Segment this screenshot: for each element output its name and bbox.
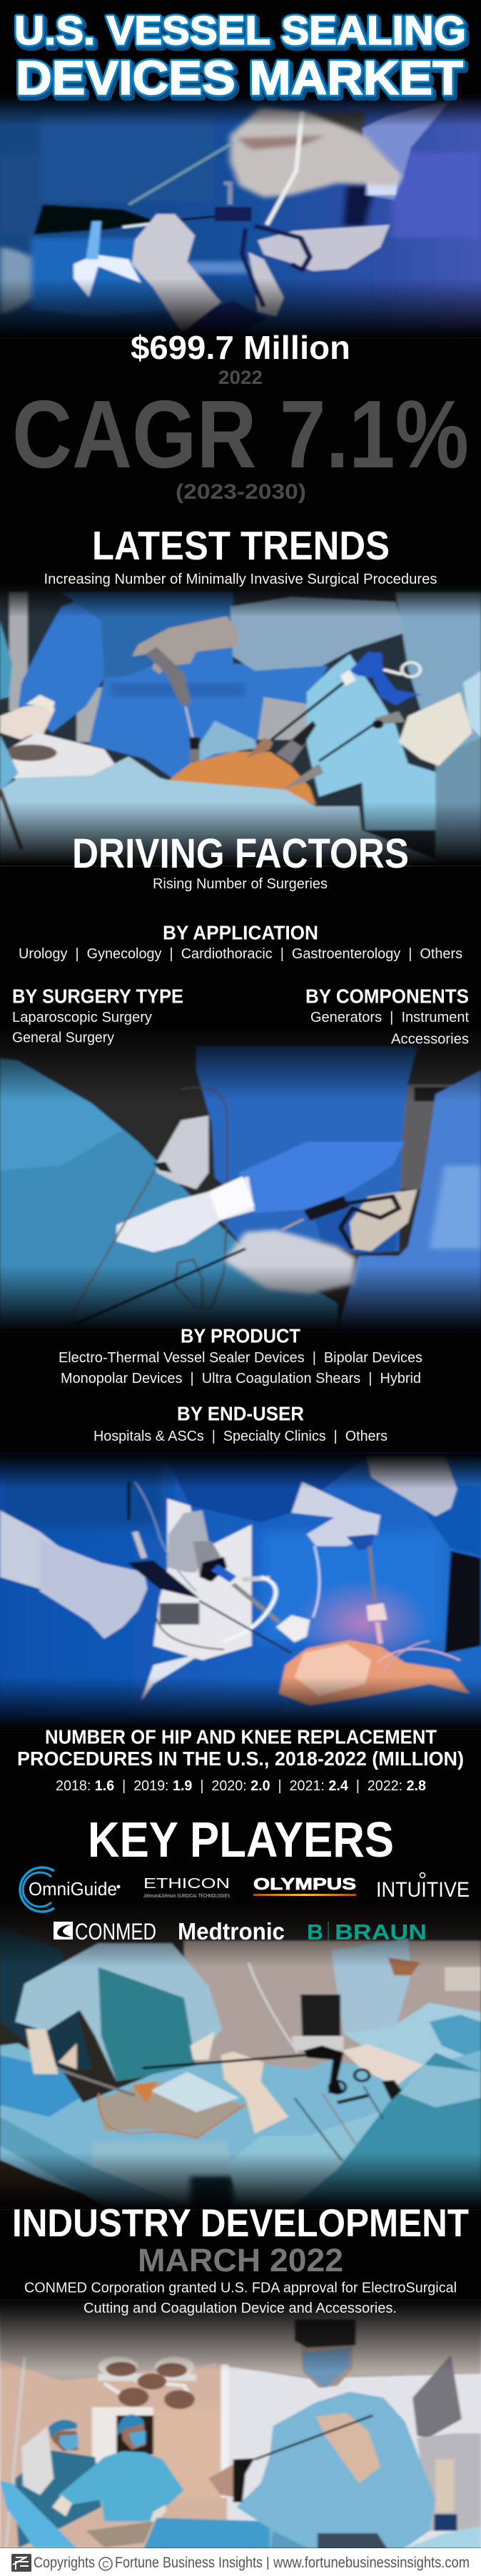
market size value: $699.7 Million bbox=[131, 329, 350, 366]
top center hand bbox=[291, 1482, 380, 1546]
ports bbox=[245, 737, 273, 759]
logo: B. Braun bbox=[307, 1920, 427, 1944]
heading: hip and knee replacement procedures: PROCEDURES IN THE U.S., 2018-2022 (MILLION) bbox=[17, 1748, 464, 1770]
title: U.S. VESSEL SEALING bbox=[14, 8, 466, 54]
logo: ConMed: CONMED bbox=[75, 1919, 156, 1944]
heading: BY COMPONENTS bbox=[305, 985, 469, 1008]
title: DEVICES MARKET bbox=[16, 51, 463, 105]
segment: laparoscopic: Laparoscopic Surgery bbox=[12, 1010, 152, 1025]
statistics by year: 2018: 1.6 | 2019: 1.9 | 2020: 2.0 | 2021: 2.4 | 2022: 2.8 bbox=[56, 1778, 426, 1794]
door alcove bbox=[92, 2407, 153, 2483]
top right glove bbox=[423, 1484, 481, 1556]
application segments: Urology | Gynecology | Cardiothoracic | Gastroenterology | Others bbox=[19, 946, 462, 962]
trend description: Increasing Number of Minimally Invasive Surgical Procedures bbox=[44, 572, 437, 587]
right glove bbox=[399, 692, 472, 766]
blue handled instrument bbox=[350, 651, 422, 705]
laparoscopic instrument bbox=[143, 2053, 335, 2068]
white background window bbox=[153, 1499, 251, 1660]
logos: key players bbox=[20, 1867, 470, 1944]
segments: Generators | Instrument bbox=[310, 1010, 469, 1025]
photo: laparoscopic surgery team around abdomen bbox=[0, 577, 481, 878]
heading: hip and knee replacement procedures: NUMBER OF HIP AND KNEE REPLACEMENT bbox=[45, 1725, 437, 1748]
right foreground drapes bbox=[227, 2107, 393, 2207]
icon: Fortune Business Insights logo bbox=[11, 2554, 31, 2572]
logo: Olympus: OLYMPUS bbox=[253, 1875, 356, 1893]
copyright text: C bbox=[102, 2559, 109, 2570]
equipment box bbox=[300, 1994, 340, 2036]
forecast period: (2023-2030) bbox=[176, 480, 306, 504]
title: DEVICES MARKET bbox=[18, 54, 465, 108]
segment: accessories: Accessories bbox=[391, 1032, 469, 1048]
development description bbox=[24, 2281, 457, 2316]
abdomen bbox=[168, 751, 316, 805]
driver description: Rising Number of Surgeries bbox=[153, 876, 328, 892]
rear hand and scissors bbox=[350, 1190, 417, 1251]
copyright text: Copyrights bbox=[34, 2555, 95, 2571]
left glove bbox=[0, 704, 55, 740]
scissors instrument bbox=[215, 183, 310, 307]
logo: OmniGuide: OmniGuide bbox=[29, 1878, 117, 1900]
copyright text: Fortune Business Insights bbox=[115, 2555, 263, 2571]
logo: Medtronic: Medtronic bbox=[178, 1918, 285, 1944]
white glove bbox=[116, 1176, 255, 1252]
drapes bbox=[343, 2003, 481, 2069]
footer: copyright bar bbox=[0, 2548, 481, 2576]
right glove bbox=[258, 225, 390, 271]
segment: general: General Surgery bbox=[12, 1030, 114, 1046]
lower left glove bbox=[132, 214, 221, 330]
heading: driving factors: DRIVING FACTORS bbox=[72, 831, 409, 877]
hand with camera bbox=[167, 1511, 208, 1572]
panel: by end-user bbox=[93, 1403, 388, 1444]
white coiled tube bbox=[224, 1577, 276, 1641]
segments line 1: Electro-Thermal Vessel Sealer Devices | Bipolar Devices bbox=[59, 1350, 422, 1366]
wall bbox=[184, 1941, 481, 2074]
teal drape bbox=[0, 1109, 340, 1332]
heading: latest trends: LATEST TRENDS bbox=[92, 523, 390, 569]
upper instrument hand bbox=[156, 1115, 208, 1190]
photo: surgeon hands with scissors instrument bbox=[0, 91, 481, 343]
upper blurred glove bbox=[230, 107, 402, 198]
copyright text bbox=[34, 2555, 470, 2571]
gloved hand with instrument bbox=[132, 616, 239, 674]
base year: 2022 bbox=[218, 367, 263, 388]
background surgeon center bbox=[52, 2414, 184, 2521]
photo: glove holding instruments against blue drape bbox=[0, 1018, 481, 1337]
second blurred glove bbox=[224, 1229, 356, 1294]
panel: by components bbox=[305, 985, 469, 1048]
development description: CONMED Corporation granted U.S. FDA approval for ElectroSurgical bbox=[24, 2281, 457, 2296]
title: U.S. VESSEL SEALING bbox=[16, 11, 468, 56]
heading: BY END-USER bbox=[177, 1403, 304, 1424]
white cloth bbox=[12, 733, 116, 783]
logo: Intuitive: INTUITIVE bbox=[376, 1878, 470, 1902]
pale gown bbox=[230, 597, 405, 671]
title: DEVICES MARKET bbox=[16, 51, 463, 105]
segments line 2: Monopolar Devices | Ultra Coagulation Shears | Hybrid bbox=[61, 1371, 421, 1386]
left sleeve and glove bbox=[0, 1511, 64, 1589]
gloved hands bbox=[342, 2044, 423, 2086]
logo: B. Braun: B bbox=[307, 1920, 323, 1944]
abdomen bbox=[279, 1640, 470, 1705]
logo: B. Braun: BRAUN bbox=[335, 1920, 427, 1944]
heading: BY PRODUCT bbox=[181, 1324, 300, 1347]
logo: OmniGuide bbox=[20, 1867, 121, 1912]
blue gown bbox=[19, 592, 328, 778]
patient leg bbox=[98, 2081, 245, 2139]
panel: by surgery type bbox=[12, 985, 183, 1046]
equipment cabinet bbox=[417, 2433, 481, 2531]
segments: Hospitals & ASCs | Specialty Clinics | Others bbox=[93, 1429, 388, 1444]
logo: Ethicon: Johnson&Johnson SURGICAL TECHNOLOGIES bbox=[143, 1894, 230, 1899]
photo: operating room surgeon holding instrument bbox=[0, 2296, 481, 2555]
table drape bbox=[144, 2517, 270, 2552]
right background person bbox=[331, 1939, 411, 2034]
logo: Ethicon: ETHICON bbox=[143, 1876, 230, 1892]
development description: Cutting and Coagulation Device and Accessories. bbox=[83, 2301, 397, 2316]
photo: laparoscopic camera and trocars over blue gowns bbox=[0, 1449, 481, 1734]
title bbox=[14, 8, 468, 108]
heading: BY SURGERY TYPE bbox=[12, 985, 183, 1008]
heading: key players: KEY PLAYERS bbox=[88, 1812, 394, 1867]
monitor bbox=[412, 2355, 462, 2438]
left gown bbox=[15, 1943, 223, 2081]
title: U.S. VESSEL SEALING bbox=[14, 8, 466, 54]
blue gown bbox=[196, 1047, 417, 1254]
logo: Olympus bbox=[253, 1875, 356, 1896]
logo: ConMed bbox=[54, 1919, 156, 1944]
surgical lamps bbox=[98, 2357, 196, 2409]
front drapes bbox=[0, 755, 437, 866]
background surgeon left bbox=[15, 2420, 101, 2548]
development date: MARCH 2022 bbox=[138, 2242, 343, 2278]
right sleeve bbox=[338, 1070, 481, 1332]
photo: operating table with surgeons and instruments bbox=[0, 1893, 481, 2214]
heading: by application: BY APPLICATION bbox=[163, 922, 318, 943]
logo: Ethicon bbox=[143, 1876, 230, 1899]
heading: hip and knee replacement procedures bbox=[17, 1725, 464, 1770]
panel: by product bbox=[59, 1324, 422, 1386]
foreground surgeon bbox=[208, 2319, 435, 2552]
